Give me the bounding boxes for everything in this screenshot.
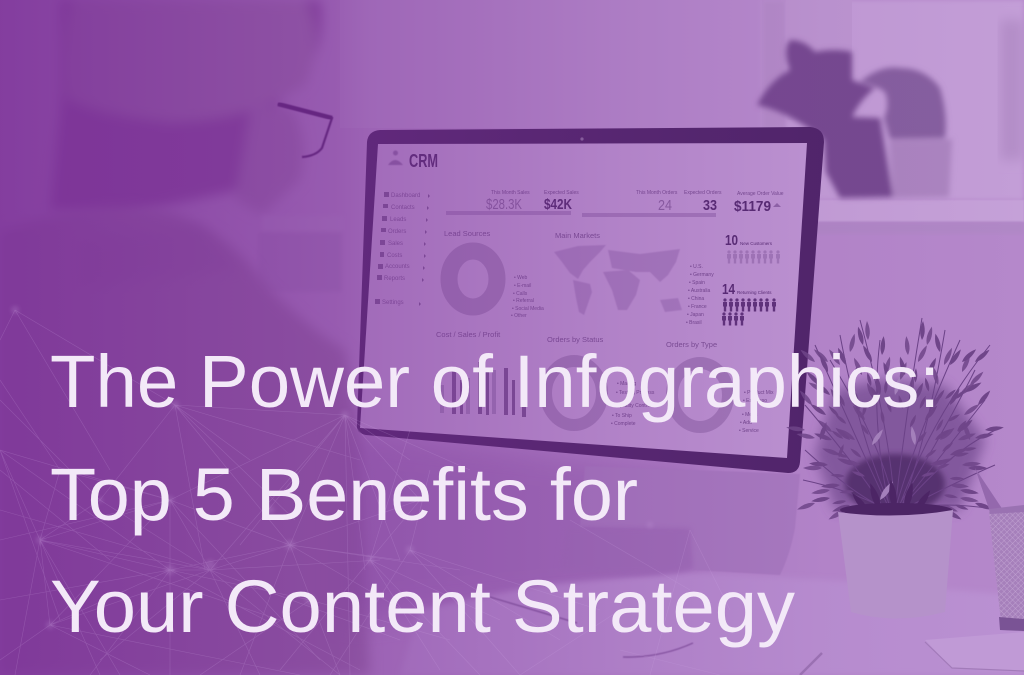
orders by status donut: • Complete xyxy=(611,421,636,427)
main markets world map: • China xyxy=(688,296,704,302)
sidebar menu: Orders xyxy=(388,229,406,235)
person: glasses xyxy=(278,104,332,157)
shelf plants xyxy=(757,40,952,198)
person: shoulders and body xyxy=(0,208,370,675)
window and shelf xyxy=(762,0,1024,234)
sidebar menu: Accounts xyxy=(385,264,410,270)
orders by status donut: • Testing Process xyxy=(616,390,655,396)
orders by type donut: • Product Mix xyxy=(744,390,774,396)
orders by status donut: • Quality Control xyxy=(615,403,651,409)
plant pot xyxy=(838,503,953,618)
network pattern xyxy=(0,310,730,675)
lead sources donut: • Other xyxy=(511,313,527,319)
main markets world map: • Australia xyxy=(688,288,711,294)
kpi row: Expected Orders xyxy=(684,190,722,196)
monitor bezel xyxy=(357,127,824,473)
person: hair and head xyxy=(50,0,332,215)
sidebar menu: Sales xyxy=(388,241,403,247)
lead sources donut: • E-mail xyxy=(514,283,531,289)
orders by type donut: • Mens xyxy=(742,412,758,418)
sidebar menu: Leads xyxy=(390,217,406,223)
orders by status donut: Orders by Status xyxy=(547,335,604,344)
main markets world map: • Spain xyxy=(689,280,705,286)
potted plant foliage xyxy=(786,318,1004,521)
monitor stand xyxy=(560,466,800,575)
lead sources donut: • Web xyxy=(514,275,528,281)
main markets world map: Main Markets xyxy=(555,231,600,240)
monitor screen xyxy=(360,137,807,458)
orders by status donut: • To Ship xyxy=(612,413,632,419)
lead sources donut: • Social Media xyxy=(512,306,544,312)
orders by type donut: • Add xyxy=(740,420,752,426)
shadow below monitor xyxy=(340,430,700,620)
kpi row: 24 xyxy=(658,197,672,214)
crm logo: CRM xyxy=(409,151,438,171)
lead sources donut: • Calls xyxy=(513,291,528,297)
cost sales profit chart xyxy=(436,330,526,417)
main markets world map: • U.S. xyxy=(690,264,703,270)
kpi row: This Month Sales xyxy=(491,190,530,196)
kpi row: This Month Orders xyxy=(636,190,678,196)
orders by status donut xyxy=(546,335,655,427)
kpi row: $42K xyxy=(544,196,572,213)
kpi row: $1179 xyxy=(734,198,771,215)
main markets world map: • France xyxy=(688,304,707,310)
kpi row: Expected Sales xyxy=(544,190,579,196)
title: The Power of Infographics: xyxy=(50,340,940,423)
main markets world map: • Japan xyxy=(687,312,704,318)
title: Your Content Strategy xyxy=(50,565,795,648)
orders by type donut: Orders by Type xyxy=(666,340,717,349)
sidebar menu: Contacts xyxy=(391,205,415,211)
network nodes xyxy=(11,306,653,629)
title xyxy=(50,340,940,648)
lead sources donut xyxy=(444,229,544,319)
customer counters: New Customers xyxy=(740,241,773,246)
orders by status donut: • Making xyxy=(617,381,636,387)
customer counters: Returning Clients xyxy=(737,290,772,295)
wall ledge behind person xyxy=(258,216,342,292)
cost sales profit chart: Cost / Sales / Profit xyxy=(436,330,501,339)
crm logo xyxy=(388,150,438,171)
orders by type donut xyxy=(666,340,774,434)
customer counters xyxy=(722,232,780,326)
main markets world map xyxy=(554,231,714,326)
pencil holder xyxy=(975,468,1024,631)
kpi row: $28.3K xyxy=(486,196,522,213)
desk xyxy=(400,572,1024,675)
sidebar menu: Costs xyxy=(387,253,402,259)
main markets world map: • Germany xyxy=(690,272,714,278)
orders by type donut: • Service xyxy=(739,428,759,434)
lead sources donut: • Referral xyxy=(513,298,534,304)
customer counters: 10 xyxy=(725,232,738,249)
lead sources donut: Lead Sources xyxy=(444,229,491,238)
sidebar menu xyxy=(375,192,430,306)
kpi row: Average Order Value xyxy=(737,191,784,197)
sidebar menu: Settings xyxy=(382,300,404,306)
title: Top 5 Benefits for xyxy=(50,453,638,536)
main markets world map: • Brasil xyxy=(686,320,702,326)
customer counters: 14 xyxy=(722,281,736,298)
sidebar menu: Dashboard xyxy=(391,193,420,199)
sidebar menu: Reports xyxy=(384,276,405,282)
desk items on left xyxy=(490,597,693,657)
kpi row xyxy=(446,190,784,217)
desk notebook and pen xyxy=(800,632,1024,675)
orders by type donut: • Espresso xyxy=(743,398,767,404)
kpi row: 33 xyxy=(703,197,717,214)
